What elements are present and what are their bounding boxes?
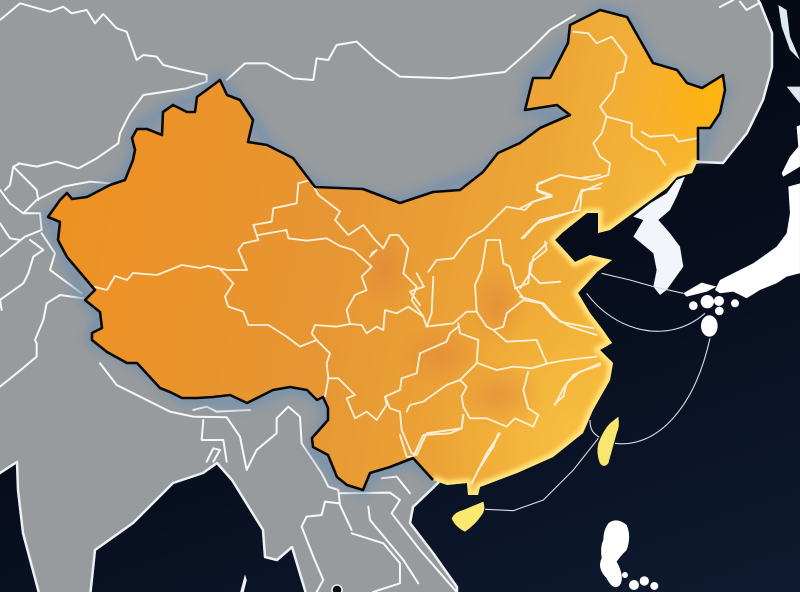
bluish glow along the China land border [48,10,725,490]
Japanese islands [683,5,800,337]
island: Borneo tip [332,585,342,592]
province borders: west [95,175,600,470]
province borders: south [400,363,600,483]
sliver island: Andaman [241,577,246,592]
mottled province shading [374,254,532,418]
Philippine islands [600,520,658,590]
province borders: north-east [520,32,697,328]
thin maritime lines [485,273,710,511]
map region: China [48,10,725,495]
coastal highlight [433,160,698,495]
island: Taiwan [597,417,619,466]
black land border of China [48,10,725,490]
island: Hainan [452,502,484,532]
Korean peninsula [633,177,685,295]
